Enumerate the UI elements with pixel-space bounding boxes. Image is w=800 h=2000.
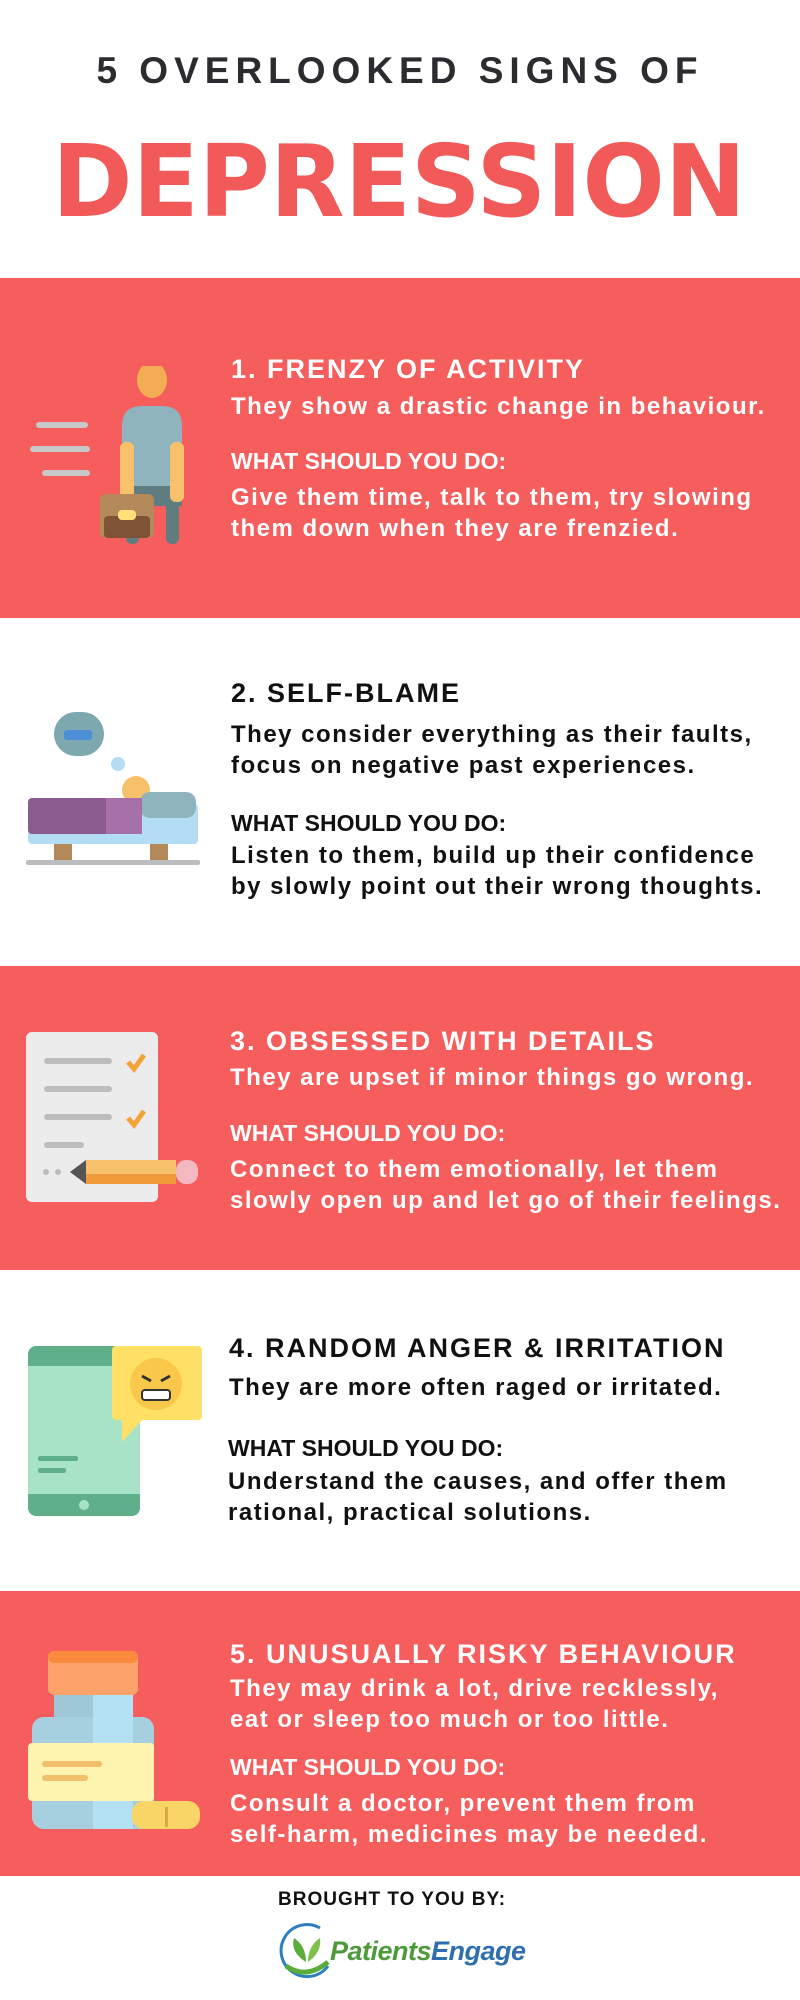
text: heading 1: 1. FRENZY OF ACTIVITY	[231, 354, 585, 384]
text: advice 2	[231, 842, 763, 900]
text: sign 2: focus on negative past experiences.	[231, 752, 696, 779]
text: advice 1: Give them time, talk to them, try slowing	[231, 484, 753, 511]
text: heading 2: 2. SELF-BLAME	[231, 678, 461, 708]
text: what to do heading 2: WHAT SHOULD YOU DO:	[231, 810, 506, 836]
text: sign 5	[230, 1675, 719, 1733]
panel: 4 random anger	[0, 1270, 800, 1591]
text: advice 5: self-harm, medicines may be needed.	[230, 1821, 708, 1848]
text: advice 5: Consult a doctor, prevent them from	[230, 1790, 696, 1817]
text: sign 2	[231, 721, 753, 779]
text: sign 3: They are upset if minor things go wrong.	[230, 1064, 754, 1091]
text: what to do heading 5: WHAT SHOULD YOU DO:	[230, 1754, 505, 1780]
text: advice 3: Connect to them emotionally, let them	[230, 1156, 718, 1183]
text: advice 4: Understand the causes, and offer them	[228, 1468, 728, 1495]
text: heading 5: 5. UNUSUALLY RISKY BEHAVIOUR	[230, 1639, 737, 1669]
icon: walking person	[30, 366, 184, 544]
text: sign 2: They consider everything as their faults,	[231, 721, 753, 748]
text: heading 3: 3. OBSESSED WITH DETAILS	[230, 1026, 656, 1056]
text: advice 1	[231, 484, 753, 542]
text: advice 1: them down when they are frenzied.	[231, 515, 679, 542]
text: logo wordmark: PatientsEngage	[330, 1936, 526, 1966]
logo: PatientsEngage	[280, 1923, 526, 1978]
text: sign 5: They may drink a lot, drive recklessly,	[230, 1675, 719, 1702]
text: sign 5: eat or sleep too much or too little.	[230, 1706, 669, 1733]
text: advice 3	[230, 1156, 781, 1214]
text: advice 5	[230, 1790, 708, 1848]
text: sign 1: They show a drastic change in behaviour.	[231, 393, 766, 420]
title: 5 OVERLOOKED SIGNS OF	[96, 50, 704, 91]
text: advice 4: rational, practical solutions.	[228, 1499, 592, 1526]
text: advice 2: by slowly point out their wrong thoughts.	[231, 873, 763, 900]
text: advice 2: Listen to them, build up their confidence	[231, 842, 755, 869]
text: what to do heading 4: WHAT SHOULD YOU DO:	[228, 1435, 503, 1461]
panel: 2 self-blame	[0, 618, 800, 966]
text: heading 4: 4. RANDOM ANGER & IRRITATION	[229, 1333, 726, 1363]
icon: checklist and pencil	[26, 1032, 198, 1202]
icon: bed with thought bubble	[26, 712, 200, 865]
text: what to do heading 1: WHAT SHOULD YOU DO:	[231, 448, 506, 474]
icon: medicine bottle	[28, 1651, 200, 1829]
panel: 3 obsessed with details	[0, 966, 800, 1270]
text: what to do heading 3: WHAT SHOULD YOU DO:	[230, 1120, 505, 1146]
icon: leaf circle	[280, 1923, 330, 1978]
footer: brought to you by: BROUGHT TO YOU BY:	[278, 1889, 506, 1910]
text: advice 4	[228, 1468, 728, 1526]
panel: 1 frenzy of activity	[0, 278, 800, 618]
icon: phone with angry face	[28, 1346, 202, 1516]
panel: 5 risky behaviour	[0, 1591, 800, 1876]
text: advice 3: slowly open up and let go of their feelings.	[230, 1187, 781, 1214]
text: sign 4: They are more often raged or irritated.	[229, 1374, 722, 1401]
